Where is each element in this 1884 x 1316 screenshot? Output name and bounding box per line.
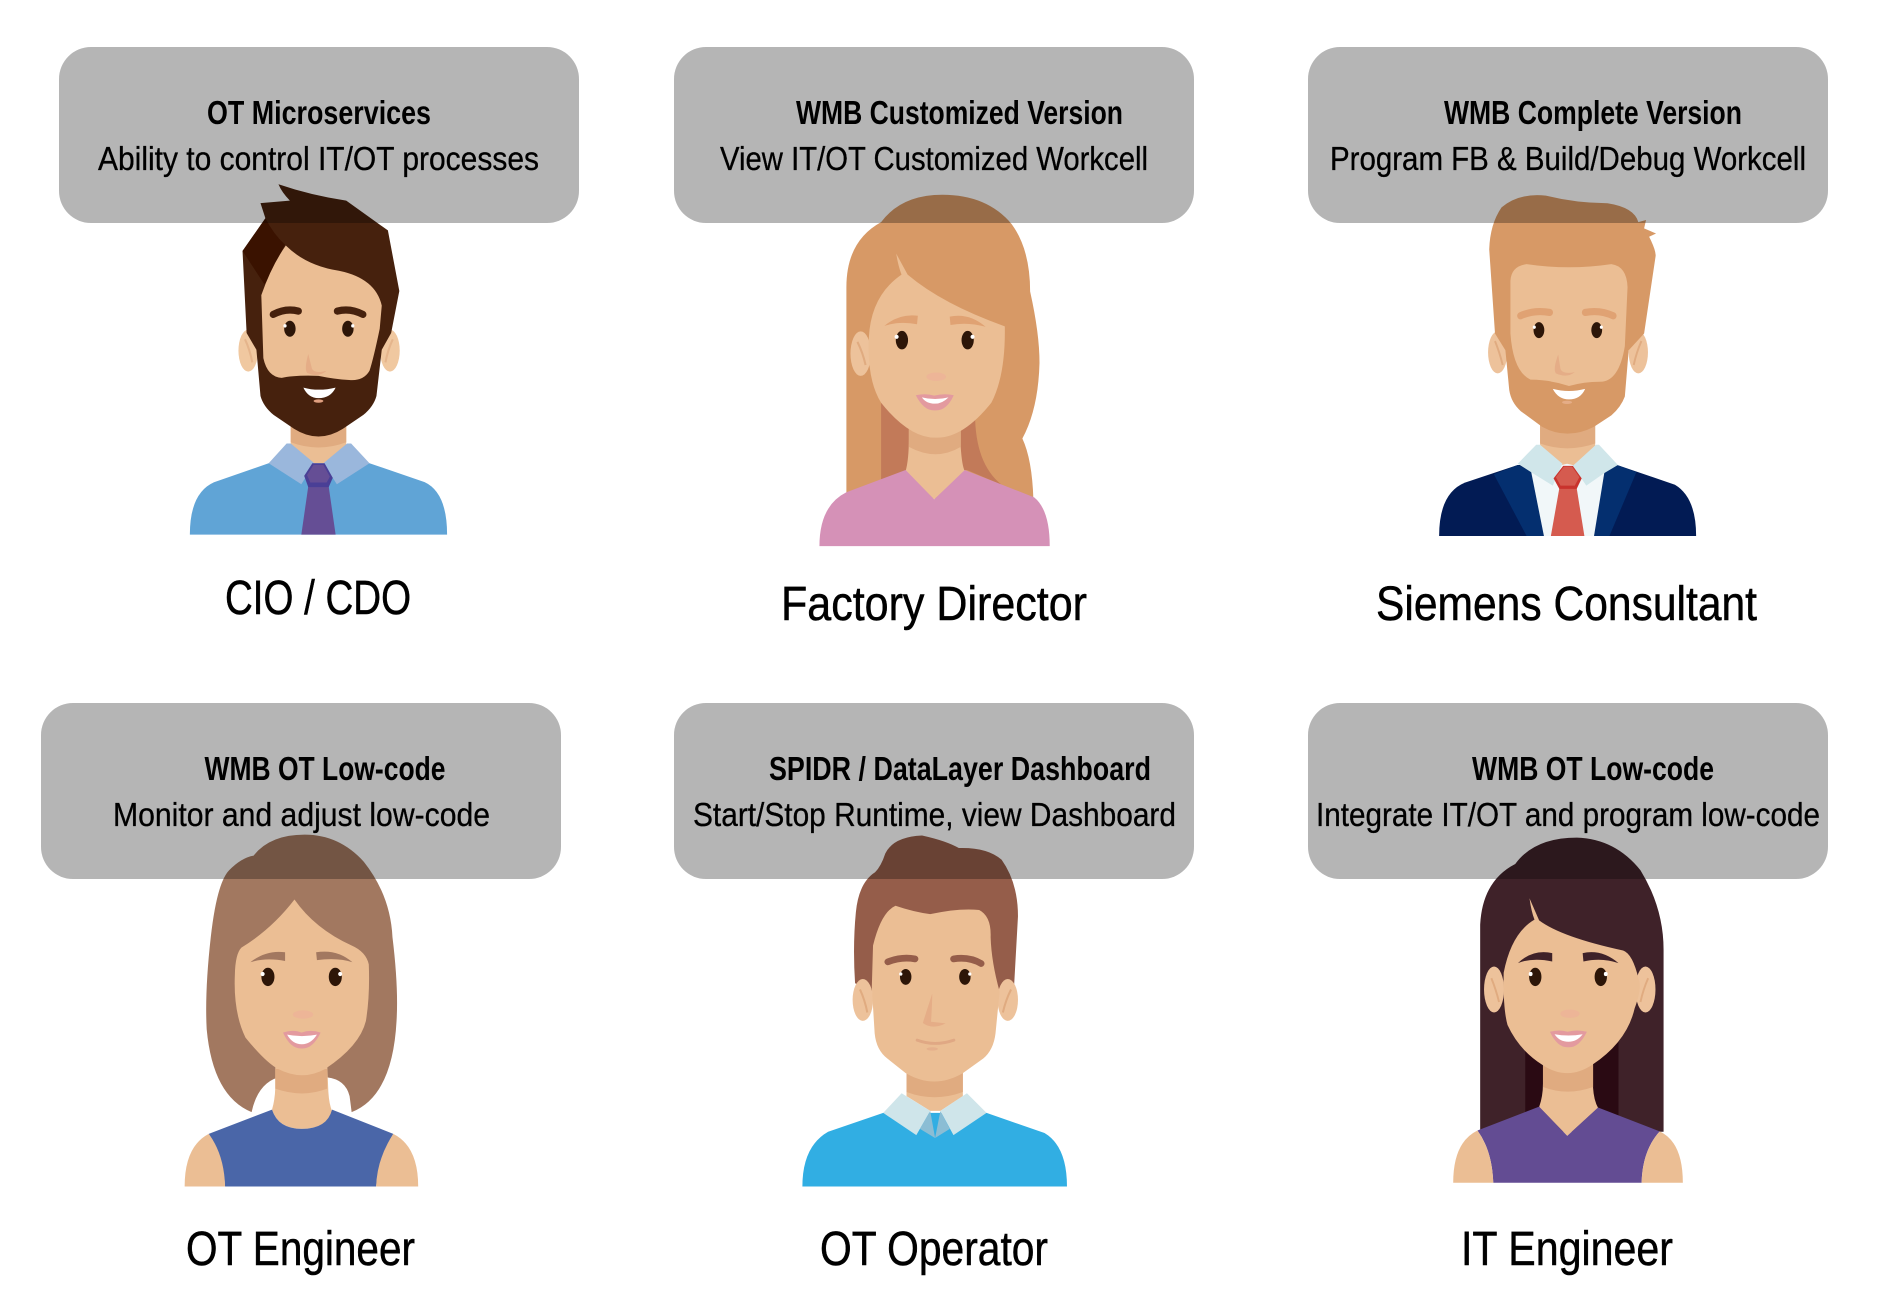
callout box [1308,703,1828,879]
heading: OT Microservices: OT Microservices [207,94,431,131]
description: Program FB & Build/Debug Workcell [1330,140,1806,177]
panel: IT Engineer [1308,703,1828,1276]
role label: IT Engineer [1461,1223,1673,1276]
panel: OT Operator [674,703,1194,1276]
callout box [41,703,561,879]
avatar: bearded man in blue shirt [190,184,447,535]
description: View IT/OT Customized Workcell [720,140,1148,177]
callout box [1308,47,1828,223]
avatar: ginger-bearded man in navy suit [1439,195,1696,536]
panel: OT Engineer [41,703,561,1276]
avatar: man in light blue sweater [802,835,1067,1187]
description: Ability to control IT/OT processes [98,140,539,177]
panel: Siemens Consultant [1308,47,1828,631]
role label: OT Engineer [186,1223,415,1276]
role label: CIO / CDO [225,572,411,625]
heading: WMB Customized Version: WMB Customized Version [796,94,1123,131]
callout box [59,47,579,223]
description: Start/Stop Runtime, view Dashboard [693,796,1176,833]
heading: WMB OT Low-code: WMB OT Low-code [204,750,446,787]
description: Integrate IT/OT and program low-code [1316,796,1820,833]
heading: WMB OT Low-code: WMB OT Low-code [1472,750,1714,787]
heading: SPIDR / DataLayer Dashboard: SPIDR / DataLayer Dashboard [769,750,1151,787]
role label: OT Operator [820,1223,1048,1276]
panel: Factory Director [674,47,1194,631]
role label: Siemens Consultant [1376,578,1757,631]
avatar: dark-haired woman in purple top [1453,838,1683,1183]
role label: Factory Director [781,578,1087,631]
avatar: long-haired woman in pink top [819,195,1050,546]
description: Monitor and adjust low-code [113,796,490,833]
callout box [674,47,1194,223]
callout box [674,703,1194,879]
panel: CIO / CDO [59,47,579,625]
avatar: woman with bob hair in blue top [185,835,418,1187]
heading: WMB Complete Version: WMB Complete Version [1444,94,1742,131]
